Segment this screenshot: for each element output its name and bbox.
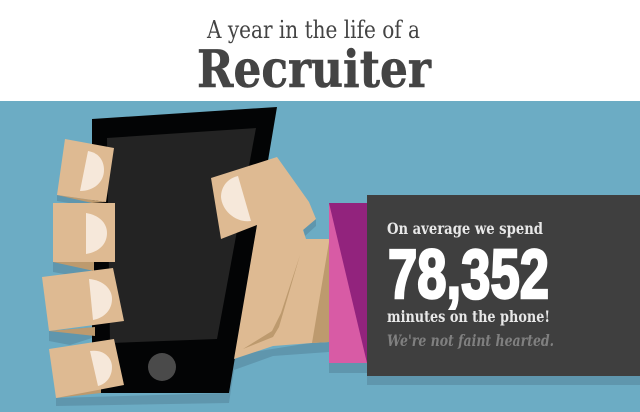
phone home button [148,353,176,381]
finger shadows on phone [49,195,106,398]
phone body [92,107,277,393]
wrist shading [312,242,329,343]
callout: tagline: We're not faint hearted. [387,331,554,350]
title line: subtitle: A year in the life of a [206,16,420,44]
fingernail 1 [80,151,104,191]
blue background panel [0,101,640,412]
callout: big number: 78,352 [388,235,549,313]
thumb and wrist [211,157,329,359]
finger 3 [42,268,124,331]
illustration: hand holding phone [42,107,640,406]
shirt cuff [329,203,367,363]
hand crease [243,255,300,349]
fingernail 3 [89,279,112,320]
finger 4 [49,339,124,398]
thumbnail [221,176,251,221]
phone screen [107,128,256,343]
title line: Recruiter: Recruiter [197,40,432,100]
callout: intro text: On average we spend [387,219,543,238]
finger 1 [57,139,114,202]
callout panel [367,195,640,376]
drop shadows [49,195,640,406]
fingernail 2 [86,213,107,254]
callout: minutes text: minutes on the phone! [387,307,550,326]
fingernail 4 [90,351,112,386]
finger 2 [53,203,115,262]
title [197,16,432,100]
